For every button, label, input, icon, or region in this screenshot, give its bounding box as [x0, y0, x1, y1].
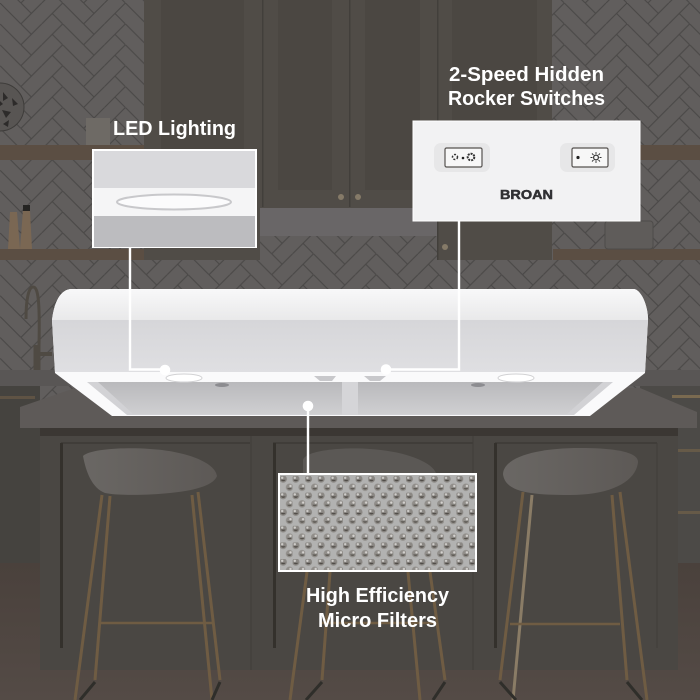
connector: micro filters: [303, 401, 313, 474]
background: decorative plate: [0, 83, 24, 131]
heading: High Efficiency Micro Filters: [306, 585, 450, 632]
background: kitchen island: [40, 428, 678, 670]
heading: 2-Speed Hidden Rocker Switches: [448, 64, 605, 110]
background: rear counter and base cabinets: [0, 370, 700, 566]
hood underside recess: [87, 382, 613, 415]
background: toaster: [605, 221, 653, 249]
panel: LED lighting close-up: [92, 149, 257, 248]
background: left bar stool: [75, 448, 220, 700]
background: faucet: [26, 287, 52, 370]
right LED light: [498, 374, 534, 382]
heading: High Efficiency Micro Filters: High Efficiency: [306, 585, 450, 607]
left vent: [215, 383, 229, 387]
connector: rocker switches: [381, 220, 459, 375]
Broan logo: BROAN: [500, 187, 553, 202]
background: wooden shelves: [0, 145, 700, 260]
right filter: [358, 382, 603, 414]
background: island countertop: [20, 388, 697, 428]
hood body: [52, 289, 648, 416]
background: tiled kitchen wall: [0, 0, 700, 400]
left filter: [98, 382, 342, 414]
LED lamp: [117, 194, 231, 210]
heading: LED Lighting: LED Lighting: [113, 118, 236, 140]
left rocker switch: [314, 376, 336, 381]
connector: LED lighting: [130, 248, 170, 375]
centre divider: [342, 382, 358, 415]
background: hood duct cover: [260, 208, 437, 266]
hood front face: [52, 320, 648, 372]
light switch: [560, 143, 615, 172]
left LED light: [166, 374, 202, 382]
hood upper band: [52, 289, 648, 320]
heading: 2-Speed Hidden Rocker Switches: 2-Speed Hidden: [449, 64, 604, 86]
heading: High Efficiency Micro Filters: Micro Filters: [318, 610, 437, 632]
background: pepper mills: [8, 205, 32, 249]
panel: rocker switches close-up: [413, 121, 640, 221]
background: floor: [0, 563, 700, 700]
fan speed switch: [434, 143, 490, 172]
panel: micro filter close-up: [278, 473, 477, 572]
background: upper cabinets: [144, 0, 552, 260]
background: middle bar stool: [290, 448, 445, 700]
background: right bar stool: [500, 448, 647, 700]
right rocker switch: [364, 376, 386, 381]
heading: 2-Speed Hidden Rocker Switches: Rocker Switches: [448, 88, 605, 110]
background: canister: [86, 118, 110, 145]
range hood: [52, 289, 648, 416]
right vent: [471, 383, 485, 387]
